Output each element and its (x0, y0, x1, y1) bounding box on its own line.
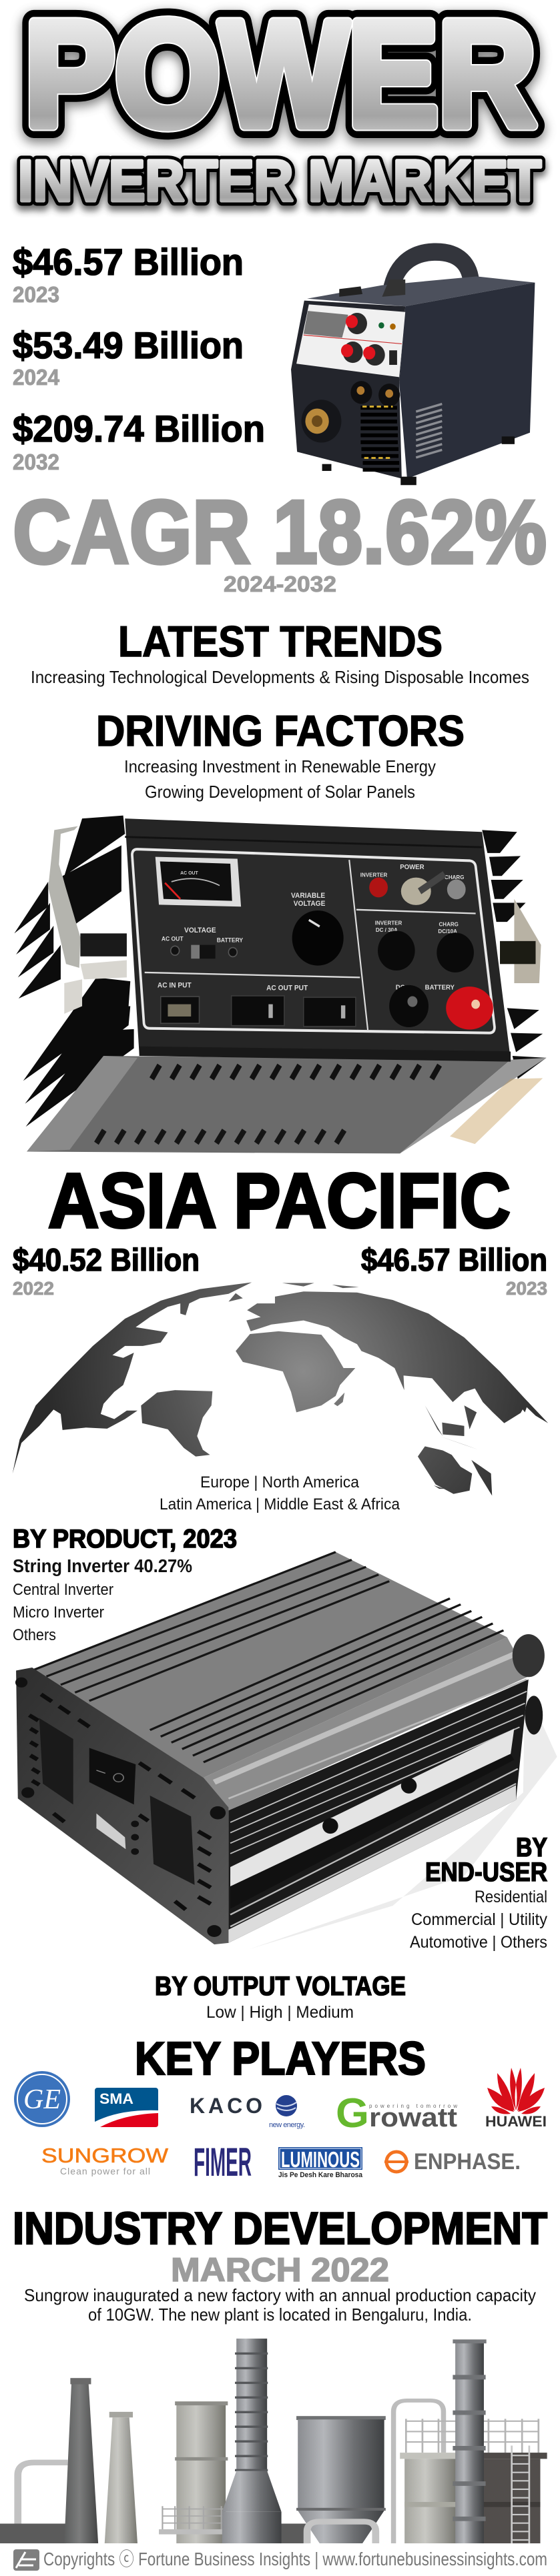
logo: GE: GE (23, 2084, 61, 2115)
stat: Asia Pacific 2023 (361, 1242, 547, 1299)
text: driving factors detail: Growing Development of Solar Panels (145, 782, 415, 802)
date: March 2022: MARCH 2022 (171, 2251, 389, 2289)
section: by product (13, 1525, 237, 1644)
image: power inverter control panel: DC / 30A (376, 926, 398, 933)
image: power inverter control panel: AC OUT PUT (266, 984, 308, 992)
image: power inverter control panel: BATTERY (425, 984, 455, 992)
logo: SMA (95, 2088, 158, 2127)
image: power inverter control panel: VOLTAGE (184, 926, 216, 934)
stat: 2032 market size: 2032 (13, 450, 59, 474)
footer: copyright (13, 2549, 547, 2571)
image: power inverter control panel: BATTERY (217, 936, 243, 944)
logo: SMA: SMA (99, 2090, 133, 2107)
heading: Asia Pacific: ASIA PACIFIC (48, 1157, 511, 1244)
logo: GE (14, 2071, 70, 2127)
stat: 2032 market size (13, 408, 265, 474)
title: INVERTER MARKET: INVERTER MARKET (18, 153, 541, 217)
image: power inverter control panel: VARIABLE (291, 892, 325, 900)
image: power inverter control panel: POWER (400, 864, 425, 871)
logo: Sungrow (41, 2144, 169, 2176)
text: driving factors detail: Increasing Investment in Renewable Energy (124, 756, 436, 776)
image: power inverter control panel: DC (396, 984, 405, 992)
image: power inverter control panel: INVERTER (360, 871, 387, 878)
image: power inverter control panel: AC IN PUT (158, 981, 192, 989)
stat: Asia Pacific 2022: 2022 (13, 1278, 54, 1299)
illustration: industrial plant (0, 2339, 547, 2543)
logo: KACO (190, 2094, 305, 2129)
heading: by end-user (425, 1833, 547, 1887)
text: industry development detail: of 10GW. The new plant is located in Bengaluru, India. (88, 2305, 472, 2325)
logo: Luminous: Jis Pe Desh Kare Bharosa (278, 2171, 363, 2179)
highlighted segment: String Inverter 40.27% (13, 1555, 192, 1576)
stat: 2024 market size: 2024 (13, 365, 60, 390)
image: power inverter control panel: AC OUT (162, 935, 184, 942)
heading: by output voltage: BY OUTPUT VOLTAGE (155, 1972, 406, 2001)
image: power inverter control panel: INVERTER (375, 919, 402, 926)
heading: driving factors: DRIVING FACTORS (96, 706, 465, 755)
stat: 2024 market size (13, 324, 244, 390)
text: other regions: Europe | North America (200, 1473, 360, 1491)
image: power inverter control panel: DC/10A (438, 928, 457, 934)
logo: KACO: KACO (190, 2094, 262, 2118)
logo: Enphase: ENPHASE. (414, 2149, 521, 2174)
image: car power inverter (15, 1552, 557, 1949)
stat: Asia Pacific 2023: 2023 (506, 1278, 547, 1299)
logo: Luminous (278, 2147, 363, 2179)
text: industry development detail (24, 2285, 536, 2325)
product list: Others (13, 1626, 56, 1644)
text: FIMER (194, 2140, 252, 2184)
stat: 2023 market size: $46.57 Billion (13, 241, 244, 283)
image: power inverter control panel (14, 816, 547, 1153)
image: power inverter control panel: AC OUT (180, 870, 198, 876)
stat: 2023 market size: 2023 (13, 282, 59, 307)
image: portable inverter unit with handle (291, 252, 535, 485)
heading: key players: KEY PLAYERS (135, 2032, 426, 2084)
product list: Micro Inverter (13, 1603, 104, 1622)
logo: Huawei: HUAWEI (485, 2113, 547, 2130)
stat: Asia Pacific 2022: $40.52 Billion (13, 1242, 200, 1277)
heading: by end-user: BY (516, 1833, 547, 1862)
end-user list: Automotive | Others (410, 1933, 547, 1952)
heading: latest trends: LATEST TRENDS (118, 617, 443, 666)
image: power inverter control panel: VOLTAGE (294, 900, 325, 908)
stat: 2023 market size (13, 241, 244, 307)
CAGR period: 2024-2032 (224, 572, 336, 596)
text: driving factors detail (124, 756, 436, 802)
text: industry development detail: Sungrow inaugurated a new factory with an annual production capacity (24, 2285, 536, 2305)
image: power inverter control panel: CHARG (439, 920, 459, 928)
icon: Fortune Business Insights logo (13, 2549, 39, 2571)
heading: by product: BY PRODUCT, 2023 (13, 1525, 237, 1553)
logo: Sungrow: Clean power for all (60, 2166, 150, 2176)
stat: 2032 market size: $209.74 Billion (13, 408, 265, 450)
stat: Asia Pacific 2023: $46.57 Billion (361, 1242, 547, 1277)
end-user list: Commercial | Utility (411, 1910, 547, 1929)
logo: Luminous: LUMINOUS (281, 2147, 360, 2172)
text: other regions: Latin America | Middle East & Africa (160, 1495, 400, 1513)
world map globe (13, 1282, 548, 1495)
product list: Central Inverter (13, 1581, 113, 1599)
logo: KACO: new energy. (269, 2121, 305, 2129)
image: power inverter control panel: CHARG (445, 874, 464, 880)
logo: Growatt: powering tomorrow (369, 2103, 457, 2109)
text: latest trends detail: Increasing Technological Developments & Rising Disposable Incomes (31, 667, 529, 687)
product list (13, 1581, 113, 1644)
logo: Growatt (336, 2090, 457, 2136)
text: output voltage list: Low | High | Medium (206, 2003, 354, 2022)
section: by end-user (410, 1833, 547, 1952)
stat: 2024 market size: $53.49 Billion (13, 324, 244, 366)
logo: Growatt: rowatt (369, 2103, 457, 2132)
logo: Sungrow: SUNGROW (41, 2144, 169, 2167)
title: INVERTER MARKET: INVERTER MARKET (18, 149, 541, 213)
end-user list: Residential (475, 1888, 547, 1906)
title: INVERTER MARKET: INVERTER MARKET (18, 149, 541, 213)
text: other regions (160, 1473, 400, 1513)
logo: Huawei (485, 2068, 547, 2130)
logo: Growatt: G (336, 2090, 369, 2136)
stat: Asia Pacific 2022 (13, 1242, 200, 1299)
end-user list (410, 1888, 547, 1952)
